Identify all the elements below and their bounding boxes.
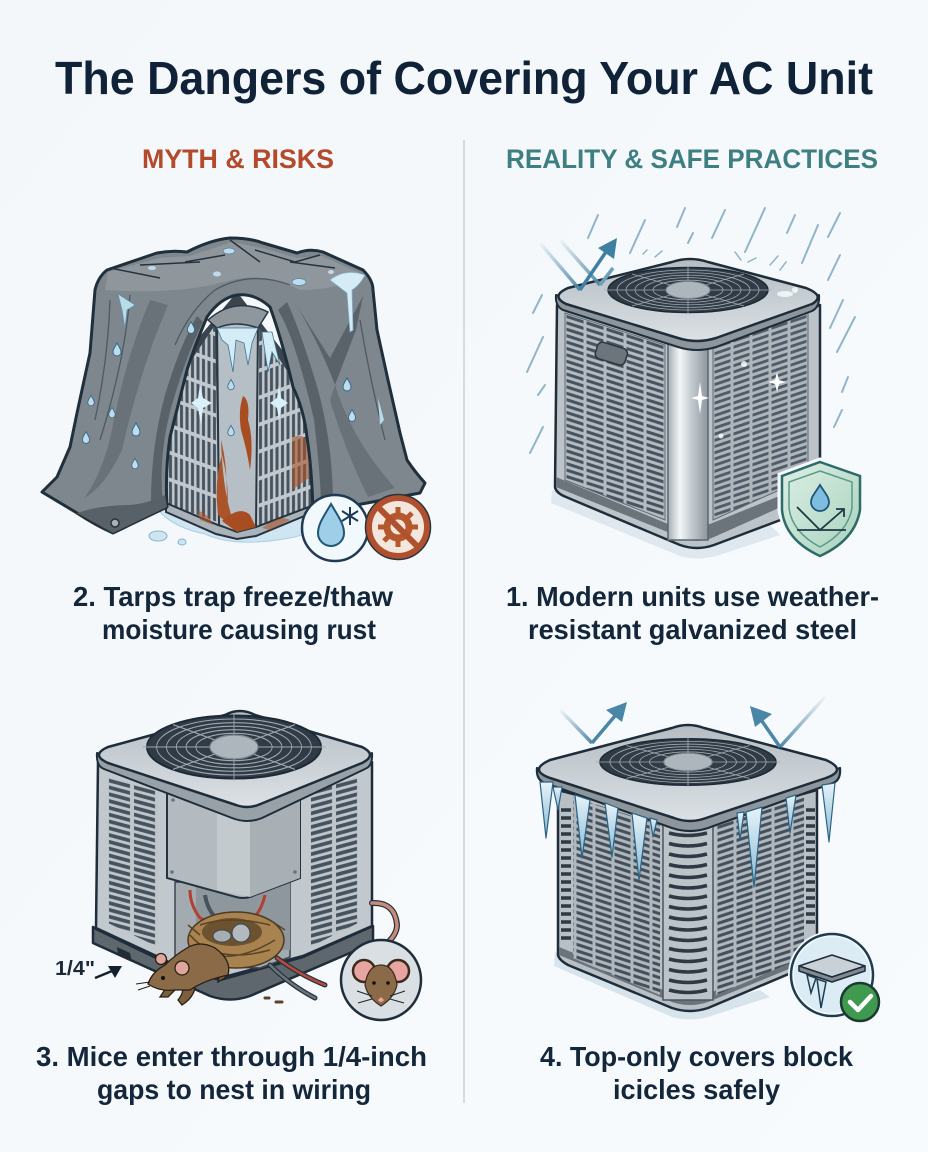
- caption: top-only covers: 4. Top-only covers block: [540, 1041, 853, 1072]
- puddle: [160, 505, 318, 542]
- panel: weather-resistant unit: [527, 208, 860, 558]
- caption: tarps: moisture causing rust: [102, 614, 376, 645]
- caption: modern units: 1. Modern units use weather-: [506, 581, 879, 612]
- covered unit with rust: [160, 292, 316, 539]
- icon: top cover badge: [791, 934, 879, 1021]
- lid cover: [537, 725, 840, 831]
- panel: top-only cover: [537, 697, 879, 1021]
- sparkles: [691, 361, 786, 438]
- panel: tarp traps moisture: [42, 238, 430, 561]
- icicles: [540, 782, 835, 887]
- caption: tarps: 2. Tarps trap freeze/thaw: [73, 581, 393, 612]
- caption: top-only covers: icicles safely: [613, 1074, 780, 1105]
- label: quarter inch gap: [55, 958, 122, 980]
- icon: shield: [780, 460, 860, 558]
- arrows: water shedding: [540, 238, 617, 290]
- nest: [188, 912, 285, 968]
- droppings: [265, 998, 282, 1002]
- heading: myth and risks: MYTH & RISKS: [142, 144, 334, 174]
- icon: green check: [841, 983, 879, 1021]
- ground shadow: [554, 952, 770, 1020]
- tarp: [42, 238, 425, 533]
- caption: modern units: [506, 581, 879, 645]
- tarp grommet: [111, 519, 119, 527]
- unit base: [93, 926, 373, 1000]
- wires: [270, 958, 325, 998]
- mouse tail: [372, 903, 397, 945]
- label: quarter inch gap: 1/4": [55, 958, 95, 980]
- panel: mice nesting: [55, 711, 421, 1020]
- icon: water drop and snowflake: [302, 495, 368, 561]
- icon: mouse badge: [341, 940, 421, 1020]
- heading: reality and safe practices: REALITY & SAFE PRACTICES: [506, 144, 878, 174]
- icon: no gear rust: [366, 494, 430, 560]
- arrows: deflected ice: [560, 697, 825, 747]
- caption: mice: gaps to nest in wiring: [97, 1074, 371, 1105]
- unit lid with fan: [556, 259, 819, 350]
- caption: mice: [36, 1041, 427, 1105]
- ground shadow: [551, 490, 780, 558]
- mouse: [136, 944, 229, 1005]
- unit body: [96, 762, 372, 978]
- caption: tarps: [73, 581, 393, 645]
- caption: modern units: resistant galvanized steel: [528, 614, 857, 645]
- unit body: [558, 790, 817, 1011]
- caption: mice: 3. Mice enter through 1/4-inch: [36, 1041, 427, 1072]
- unit lid with fan: [97, 711, 372, 821]
- title: The Dangers of Covering Your AC Unit: [55, 52, 873, 104]
- unit body: [555, 305, 820, 548]
- caption: top-only covers: [540, 1041, 853, 1105]
- rain streaks: [527, 208, 855, 453]
